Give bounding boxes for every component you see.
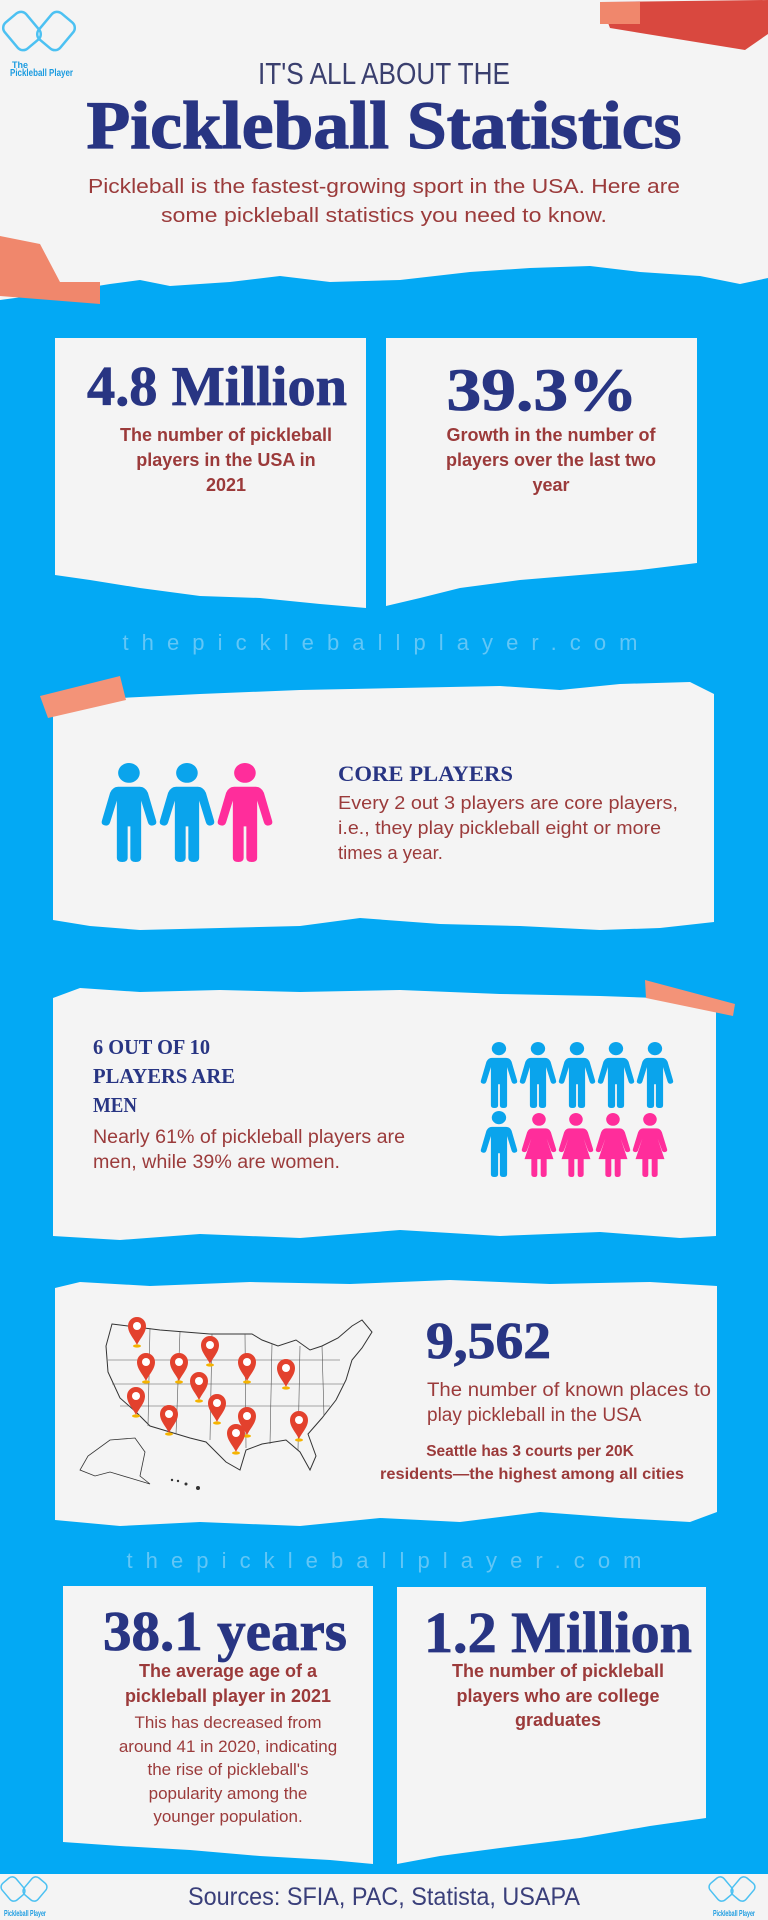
panel: places to play: Seattle has 3 courts per 20K: [426, 1443, 635, 1460]
icon grid: 10 people: [481, 1042, 673, 1177]
logo: top left: The: [12, 60, 28, 70]
heading: CORE PLAYERS: [338, 761, 513, 786]
body: Every 2 out 3 players are core players,: [338, 792, 678, 813]
card: 1.2 million: The number of pickleball: [452, 1661, 664, 1681]
card: 38.1 years: popularity among the: [149, 1784, 307, 1803]
card: 38.1 years: [63, 1586, 373, 1864]
body: [338, 792, 678, 863]
card: 38.1 years: pickleball player in 2021: [125, 1686, 331, 1706]
heading: 6 OUT OF 10: [93, 1035, 210, 1059]
panel: men vs women: [53, 980, 735, 1240]
footer: [0, 1874, 768, 1920]
card: 38.1 years: the rise of pickleball's: [147, 1760, 309, 1779]
pins: [128, 1317, 146, 1348]
card: 39.3%: year: [532, 475, 570, 495]
card: 4.8 million: The number of pickleball: [120, 425, 332, 445]
panel: places to play: [55, 1280, 717, 1526]
logo: footer left: [0, 1875, 49, 1918]
logo: top left: Pickleball Player: [10, 68, 73, 79]
body: Nearly 61% of pickleball players are: [93, 1127, 405, 1148]
card: 39.3%: Growth in the number of: [446, 425, 656, 445]
card: 4.8 million: [55, 338, 366, 608]
watermark 1: thepickleballplayer.com: [122, 630, 638, 655]
body: times a year.: [338, 842, 443, 863]
card: 38.1 years: The average age of a: [139, 1661, 318, 1681]
heading: PLAYERS ARE: [93, 1064, 235, 1088]
logo: top left: [0, 9, 78, 79]
card: 4.8 million: 2021: [206, 475, 246, 495]
title kicker: IT'S ALL ABOUT THE: [258, 56, 510, 91]
panel: core players: [40, 676, 714, 930]
stat: 9,562: 9,562: [426, 1313, 551, 1370]
logo: footer right: [707, 1875, 757, 1918]
card: 38.1 years: 38.1 years: [103, 1601, 347, 1663]
heading: MEN: [93, 1093, 137, 1117]
card: 39.3%: [386, 338, 697, 606]
map: USA: [80, 1317, 372, 1490]
card: 1.2 million: graduates: [515, 1710, 601, 1730]
heading: [93, 1035, 235, 1117]
card: 38.1 years: younger population.: [153, 1807, 303, 1826]
card: 4.8 million: 4.8 Million: [87, 356, 347, 418]
footer: Sources: SFIA, PAC, Statista, USAPA: [188, 1883, 580, 1911]
card: 38.1 years: This has decreased from: [134, 1713, 322, 1732]
body: men, while 39% are women.: [93, 1152, 340, 1173]
panel: places to play: play pickleball in the USA: [427, 1405, 642, 1426]
body: [93, 1127, 405, 1173]
title: Pickleball Statistics: [86, 87, 682, 163]
card: 1.2 million: players who are college: [456, 1686, 660, 1706]
panel: places to play: residents—the highest among all cities: [380, 1466, 684, 1483]
card: 38.1 years: around 41 in 2020, indicating: [119, 1737, 337, 1756]
subtitle: Pickleball is the fastest-growing sport in the USA. Here are: [88, 176, 680, 198]
watermark 2: thepickleballplayer.com: [126, 1548, 642, 1573]
tape: [645, 980, 735, 1016]
tape: left: [0, 236, 100, 304]
tape: top right: [600, 0, 768, 50]
subtitle: [88, 176, 680, 227]
card: 39.3%: 39.3%: [446, 357, 638, 423]
card: 39.3%: players over the last two: [446, 450, 656, 470]
body: i.e., they play pickleball eight or more: [338, 817, 661, 838]
card: 1.2 million: 1.2 Million: [424, 1600, 692, 1665]
tape: [40, 676, 126, 718]
logo: footer left: Pickleball Player: [4, 1909, 46, 1918]
card: 4.8 million: players in the USA in: [136, 450, 316, 470]
icon: three people: [102, 763, 272, 862]
panel: places to play: The number of known places to: [427, 1380, 711, 1401]
card: 1.2 million: [397, 1587, 706, 1864]
subtitle: some pickleball statistics you need to know.: [161, 205, 607, 227]
